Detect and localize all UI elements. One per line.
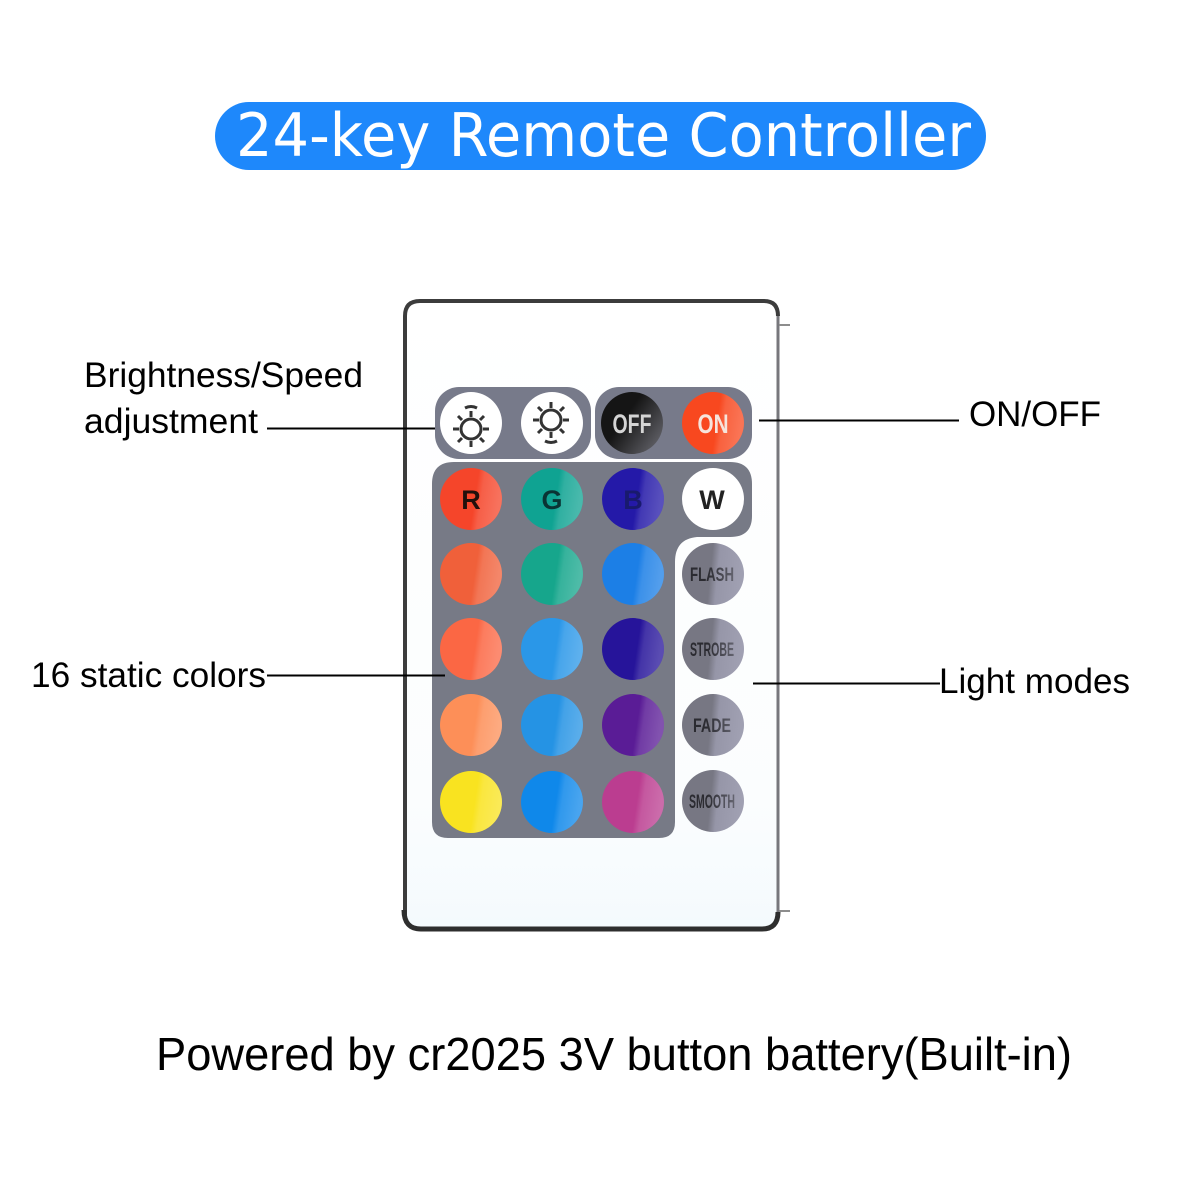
label: brightness/speed adjustment	[84, 356, 435, 441]
mode buttons: FLASH	[690, 565, 734, 586]
mode buttons: STROBE	[690, 640, 734, 661]
RGBW row: B	[623, 485, 643, 515]
ON button: ON	[698, 409, 728, 439]
remote body	[404, 301, 790, 929]
label: brightness/speed adjustment: adjustment	[84, 402, 258, 441]
icon: brightness up button	[440, 392, 502, 454]
battery note: Powered by cr2025 3V button battery(Built-in)	[156, 1028, 1072, 1080]
ON button	[682, 392, 744, 454]
label: 16 static colors: 16 static colors	[31, 656, 266, 695]
mode buttons: FADE	[693, 716, 731, 737]
panel: brightness buttons	[435, 387, 591, 459]
label: on/off: ON/OFF	[969, 395, 1101, 434]
RGBW row	[440, 468, 744, 530]
OFF button	[601, 392, 663, 454]
RGBW row: G	[541, 485, 563, 515]
OFF button: OFF	[612, 409, 652, 439]
label: light modes: Light modes	[939, 662, 1130, 701]
RGBW row: W	[699, 485, 725, 515]
static colour buttons	[440, 543, 664, 833]
panel: power buttons	[595, 387, 752, 459]
RGBW row: R	[461, 485, 481, 515]
remote controller	[404, 301, 790, 929]
mode buttons	[682, 543, 744, 832]
panel: color buttons	[432, 462, 752, 838]
label: brightness/speed adjustment: Brightness/Speed	[84, 356, 363, 395]
title: 24-key Remote Controller	[236, 101, 971, 171]
icon: brightness down button	[521, 392, 583, 454]
mode buttons: SMOOTH	[689, 792, 735, 813]
